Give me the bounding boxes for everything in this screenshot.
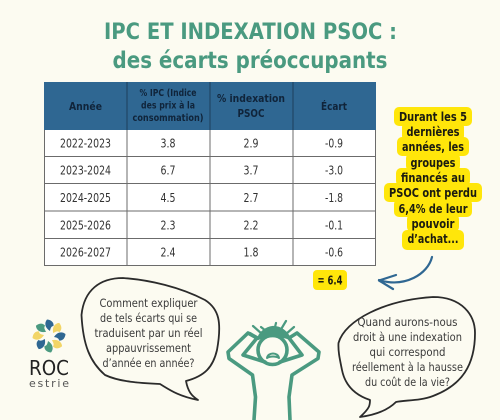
table rows: 2.4 xyxy=(160,246,176,260)
table rows: 6.7 xyxy=(160,164,176,178)
table rows xyxy=(44,130,376,266)
speech bubble: right question: réellement à la hausse xyxy=(352,360,463,374)
table rows: 2023-2024 xyxy=(60,164,111,178)
callout: purchasing power loss: pouvoir xyxy=(412,216,455,231)
table header: % IPC (Indice xyxy=(140,88,196,99)
table rows: 2.7 xyxy=(244,191,258,205)
callout: purchasing power loss: années, les xyxy=(402,139,464,154)
logo: ROC estrie xyxy=(29,320,69,390)
table header: consommation) xyxy=(132,113,204,124)
speech bubble: left question: Comment expliquer xyxy=(100,296,198,310)
table rows: 2025-2026 xyxy=(60,218,111,232)
speech bubble: right question xyxy=(338,297,475,417)
table rows: -0.9 xyxy=(325,136,343,150)
table header: Année xyxy=(69,100,102,113)
speech bubble: left question xyxy=(82,278,219,400)
table header: des prix à la xyxy=(141,100,195,112)
speech bubble: right question: Quand aurons-nous xyxy=(358,315,458,329)
icon: stressed person xyxy=(228,321,319,420)
table rows: 2026-2027 xyxy=(60,246,111,260)
callout: purchasing power loss: financés au xyxy=(401,170,465,185)
table rows: -0.1 xyxy=(325,218,343,232)
table rows: 3.7 xyxy=(244,164,258,178)
logo: ROC estrie: ROC xyxy=(29,356,69,380)
title: des écarts préoccupants xyxy=(112,48,388,74)
speech bubble: left question: de tels écarts qui se xyxy=(100,311,197,325)
speech bubble: right question: qui correspond xyxy=(370,345,446,359)
speech bubble: left question: traduisent par un réel xyxy=(94,326,202,340)
table rows: 2.9 xyxy=(244,136,258,150)
callout: purchasing power loss: 6,4% de leur xyxy=(398,201,468,216)
callout: purchasing power loss: Durant les 5 xyxy=(399,109,467,124)
callout: purchasing power loss: dernières xyxy=(406,124,460,139)
callout: purchasing power loss: groupes xyxy=(410,155,456,170)
logo: ROC estrie: estrie xyxy=(29,377,69,390)
title xyxy=(104,20,397,74)
table header xyxy=(44,82,376,130)
speech bubble: left question: appauvrissement xyxy=(106,341,191,355)
table rows: 2022-2023 xyxy=(60,136,111,150)
table header: Écart xyxy=(321,100,347,113)
data table xyxy=(44,82,376,266)
table header: % indexation xyxy=(217,93,285,105)
hair xyxy=(250,321,294,339)
table rows: 2024-2025 xyxy=(60,191,111,205)
table rows: -0.6 xyxy=(325,246,343,260)
callout: purchasing power loss: PSOC ont perdu xyxy=(389,185,477,200)
speech bubble: right question: droit à une indexation xyxy=(353,330,462,344)
table header: PSOC xyxy=(238,108,265,120)
table rows: 4.5 xyxy=(160,191,176,205)
table rows: -1.8 xyxy=(325,191,343,205)
callout: purchasing power loss: d’achat... xyxy=(408,231,458,246)
total badge xyxy=(313,270,347,290)
table rows: 3.8 xyxy=(160,136,176,150)
table rows: 1.8 xyxy=(244,246,258,260)
total badge: = 6.4 xyxy=(318,274,342,288)
speech bubble: right question: du coût de la vie? xyxy=(365,375,450,389)
arrow to total xyxy=(379,257,432,289)
table rows: 2.3 xyxy=(160,218,176,232)
table rows: -3.0 xyxy=(325,164,343,178)
icon: pinwheel xyxy=(32,320,66,352)
speech bubble: left question: d’année en année? xyxy=(102,356,194,370)
table rows: 2.2 xyxy=(244,218,258,232)
callout: purchasing power loss xyxy=(384,107,482,250)
title: IPC ET INDEXATION PSOC : xyxy=(104,20,397,45)
